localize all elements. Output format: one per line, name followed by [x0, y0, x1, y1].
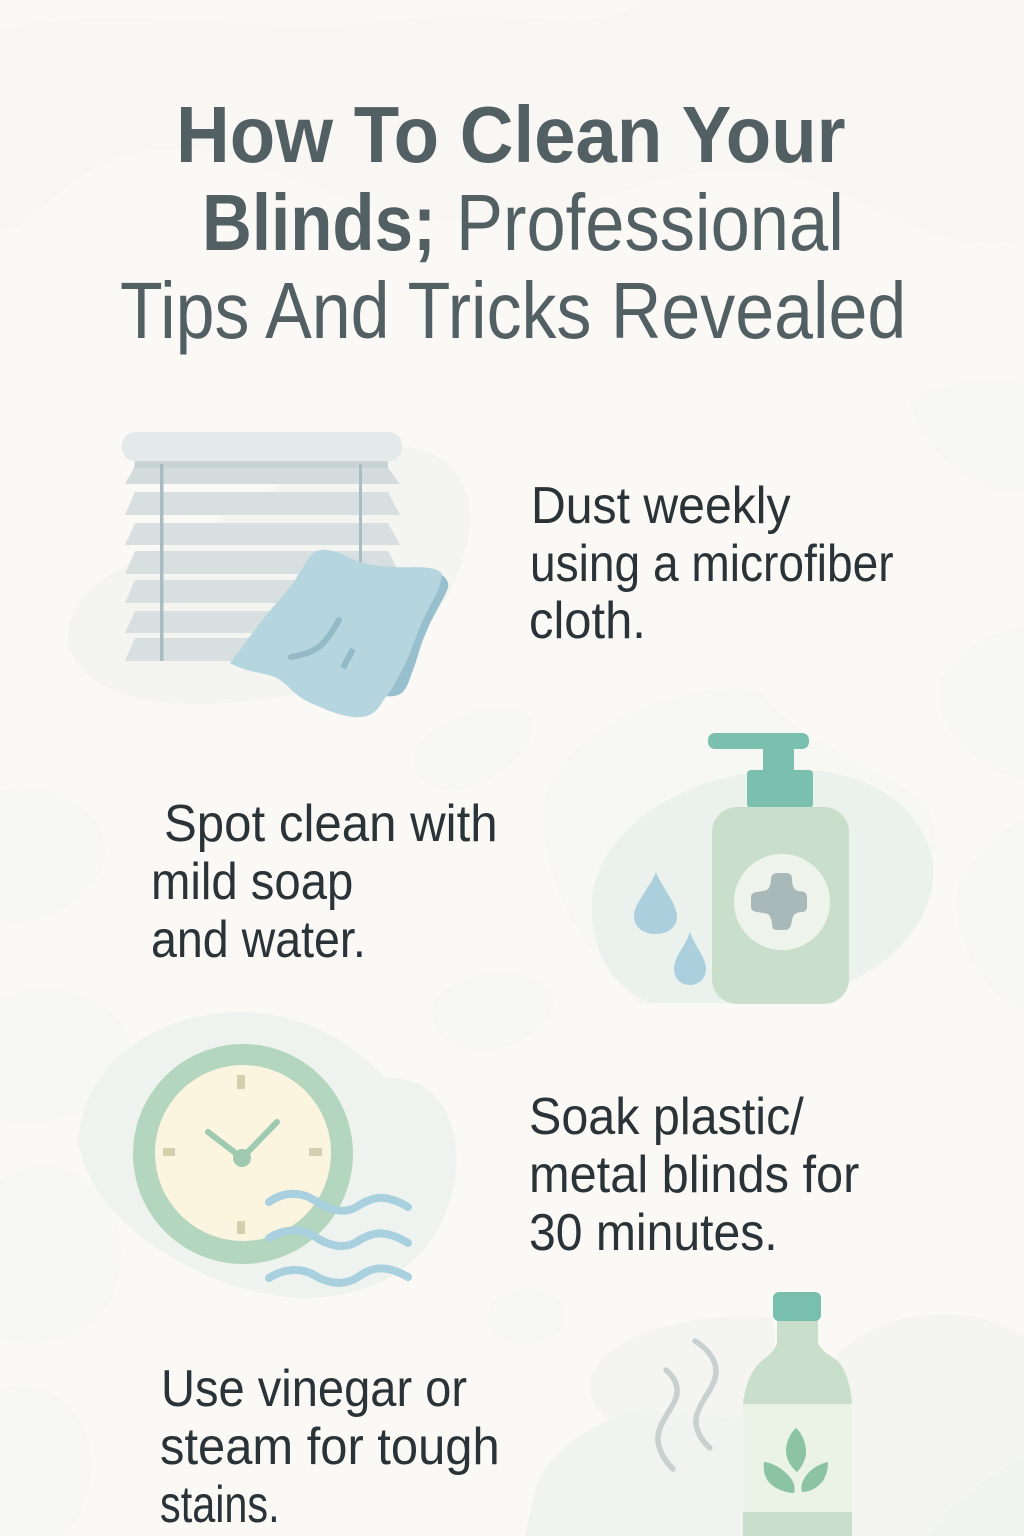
- tip 4 text: [160, 1360, 500, 1534]
- tip 3 text: 30 minutes.: [529, 1204, 778, 1262]
- cords: [160, 464, 362, 661]
- tip 4 text: steam for tough: [160, 1418, 500, 1476]
- water waves: [269, 1194, 408, 1283]
- title: Tips And Tricks Revealed: [120, 266, 906, 355]
- tip 2 text: [151, 795, 498, 969]
- tip 3 text: [529, 1088, 859, 1262]
- title: [120, 90, 906, 355]
- icon: vinegar bottle and steam: [655, 1292, 852, 1536]
- tip 1 text: [529, 477, 894, 650]
- tip 4 text: stains.: [160, 1476, 280, 1534]
- bottle: [743, 1318, 852, 1536]
- water drops: [634, 872, 706, 985]
- pump: [708, 733, 813, 808]
- icon: blinds and cloth: [122, 432, 448, 718]
- cross badge: [734, 854, 830, 950]
- bottle cap: [773, 1292, 821, 1321]
- leaves: [764, 1428, 828, 1493]
- tip 1 text: using a microfiber: [530, 535, 894, 593]
- title: Professional: [456, 178, 844, 267]
- icon: clock and water waves: [133, 1044, 412, 1287]
- tip 1 text: cloth.: [529, 592, 646, 650]
- bottle body: [712, 807, 849, 1004]
- icon: soap bottle and drops: [634, 733, 849, 1004]
- title: How To Clean Your: [176, 90, 846, 179]
- cloth: [230, 550, 448, 717]
- clock face: [133, 1044, 353, 1264]
- slats: [125, 461, 400, 661]
- tip 3 text: Soak plastic/: [529, 1088, 804, 1146]
- tip 1 text: Dust weekly: [531, 477, 791, 535]
- tip 3 text: metal blinds for: [529, 1146, 859, 1204]
- head rail: [122, 432, 402, 461]
- steam: [658, 1341, 716, 1469]
- title: Blinds;: [202, 178, 436, 267]
- tip 4 text: Use vinegar or: [161, 1360, 467, 1418]
- bottle label: [743, 1404, 852, 1512]
- tip 2 text: and water.: [151, 911, 366, 969]
- tip 2 text: Spot clean with: [164, 795, 498, 853]
- tip 2 text: mild soap: [151, 853, 353, 911]
